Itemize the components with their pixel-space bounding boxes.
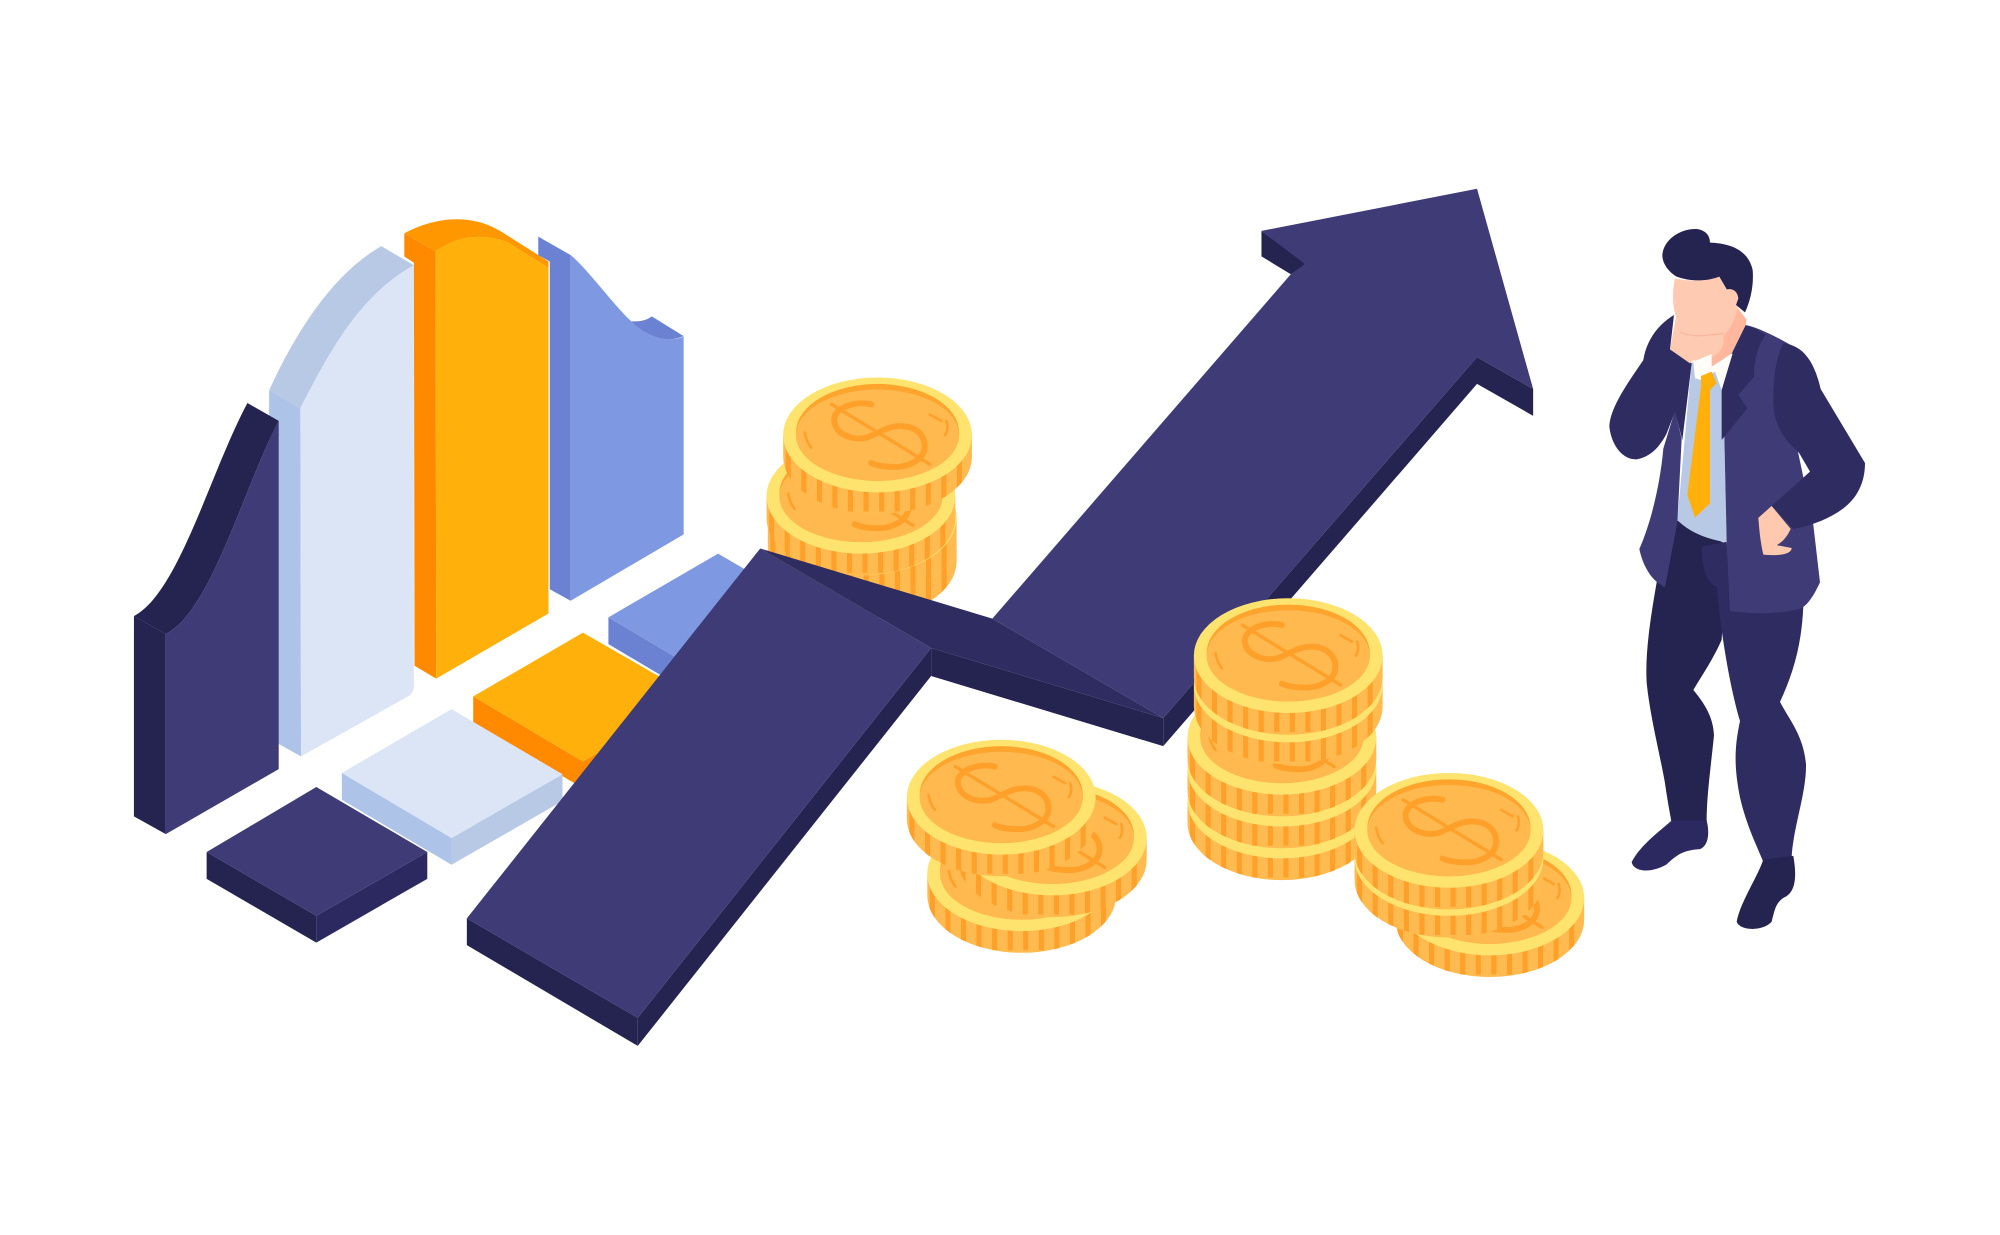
person: arm on hip bbox=[1772, 343, 1865, 529]
arrow: upper segment bbox=[992, 189, 1533, 746]
coin stack: center left bbox=[907, 740, 1147, 953]
floor tile: light blue bbox=[342, 709, 562, 865]
growth arrow bbox=[467, 189, 1533, 1046]
coin stack: tall center bbox=[1187, 598, 1383, 880]
chart bar: orange bbox=[404, 219, 548, 679]
person: raised arm bbox=[1609, 315, 1692, 459]
floor tile: navy bbox=[207, 787, 427, 943]
person: front leg bbox=[1717, 582, 1806, 862]
floor tile: blue bbox=[608, 554, 829, 709]
chart bar: blue wave bbox=[538, 237, 684, 601]
person: jaw crease bbox=[1680, 332, 1723, 336]
coin stack: right bbox=[1355, 773, 1584, 977]
person: back shoe bbox=[1632, 820, 1708, 871]
chart bar: navy wave bbox=[134, 403, 279, 834]
person: jacket right panel bbox=[1723, 325, 1820, 613]
chart bar: light blue curve bbox=[269, 246, 414, 756]
person: back leg bbox=[1646, 520, 1727, 824]
illustration: financial growth scene bbox=[134, 188, 1865, 1046]
coin stack: behind arrow bbox=[767, 378, 972, 619]
person: upper body bbox=[1609, 229, 1865, 529]
person: collar bbox=[1693, 353, 1733, 390]
person: lower body and jacket bbox=[1632, 325, 1820, 929]
person: jacket left panel bbox=[1639, 410, 1682, 587]
arrow: lower segment bbox=[467, 548, 931, 1046]
arrow: fold bbox=[760, 548, 1163, 746]
person: lapel bbox=[1722, 325, 1766, 440]
person: neck shadow bbox=[1710, 308, 1747, 367]
person: tie bbox=[1687, 372, 1717, 518]
person: hair bbox=[1662, 229, 1753, 312]
person: front shoe bbox=[1737, 856, 1795, 929]
person: shirt bbox=[1677, 358, 1730, 542]
person: trousers crotch bbox=[1702, 542, 1732, 611]
businessman figure bbox=[1609, 229, 1865, 929]
person: face and hand bbox=[1670, 277, 1747, 367]
floor tile: orange bbox=[473, 633, 694, 788]
person: hand on hip bbox=[1758, 506, 1792, 555]
